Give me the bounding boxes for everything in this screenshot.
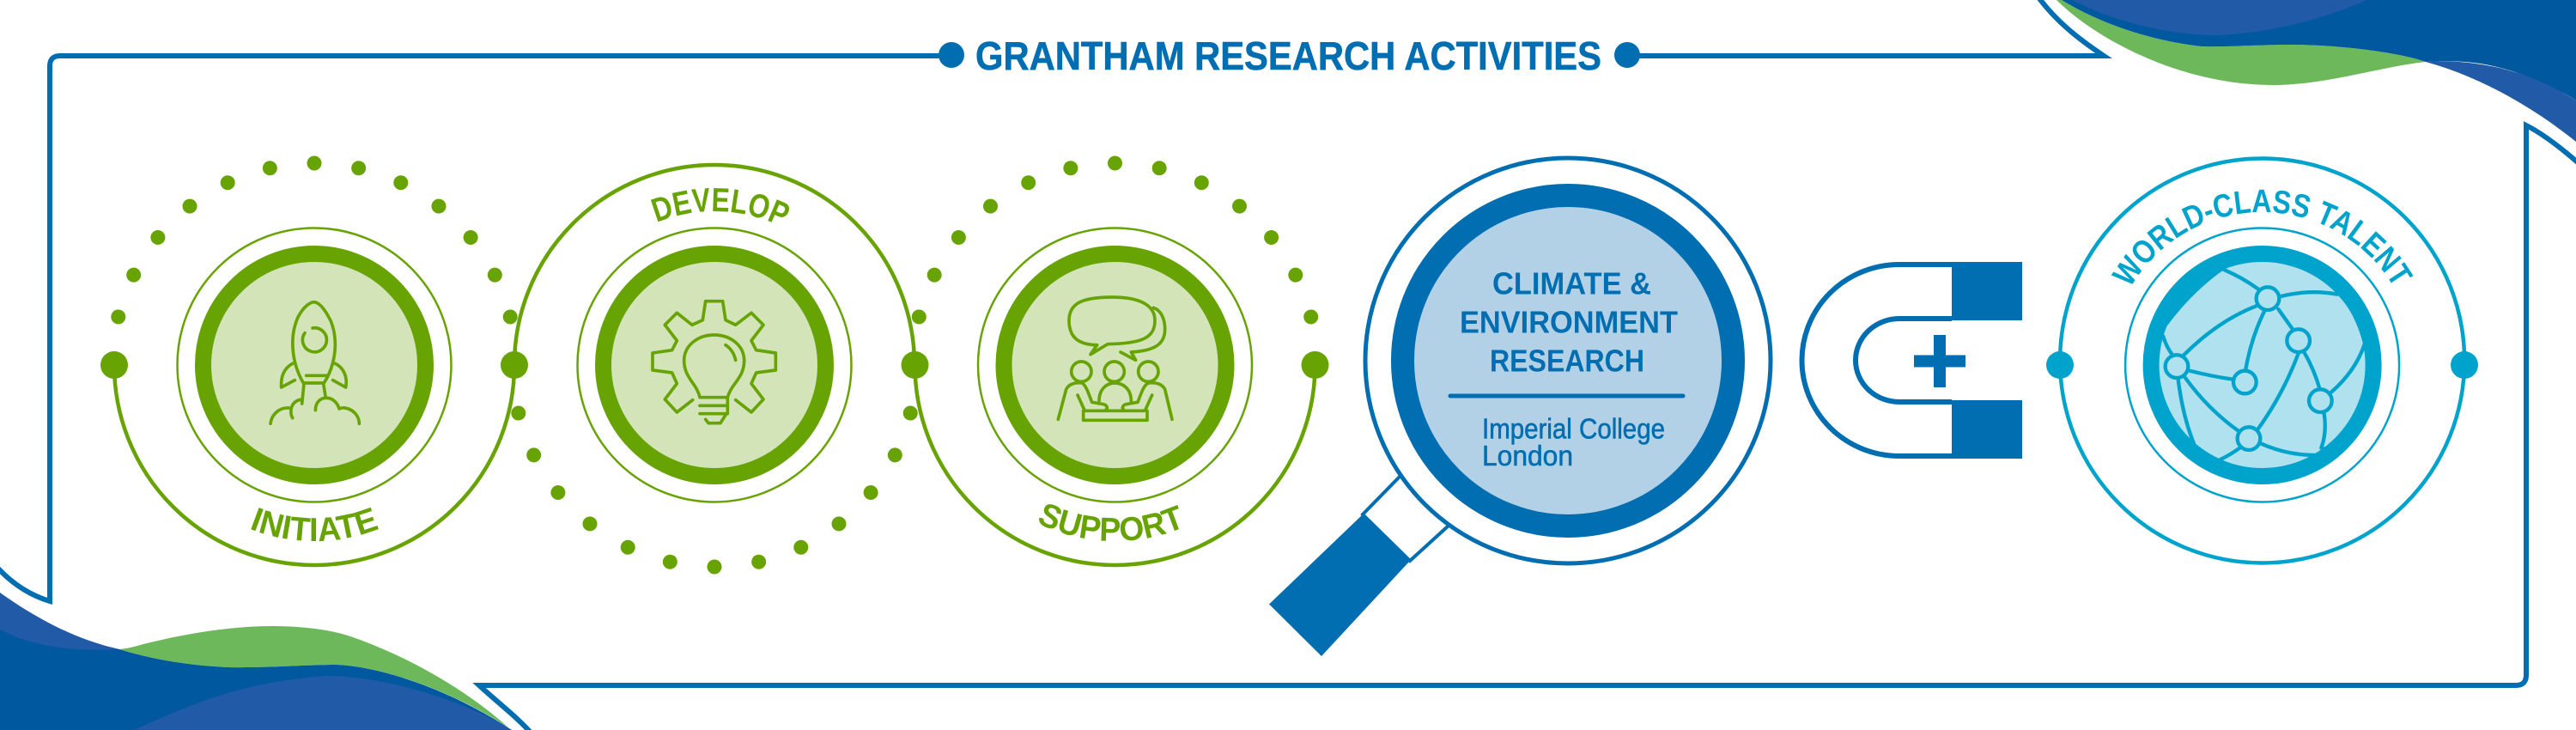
icon: magnet with plus [1801, 262, 2022, 459]
logo text: Imperial College [1482, 412, 1665, 445]
dotted arc: develop [510, 405, 919, 574]
badge: talent [2125, 228, 2399, 502]
magnifier lens [1403, 196, 1733, 526]
title: GRANTHAM RESEARCH ACTIVITIES [975, 33, 1601, 78]
outer ring: talent [2060, 158, 2464, 563]
magnifier outer ring [1365, 158, 1771, 563]
connector dots: green nodes [100, 351, 1329, 379]
label: develop: DEVELOP [651, 187, 789, 222]
lens heading: RESEARCH [1490, 344, 1644, 378]
magnifier handle [1269, 477, 1449, 656]
logo text [1482, 412, 1665, 471]
label: world-class talent: WORLD-CLASS TALENT [2111, 189, 2413, 284]
label: initiate: INITIATE [251, 507, 379, 541]
icon: rocket [270, 302, 359, 423]
icon: globe network [2162, 268, 2365, 460]
panel: support [912, 156, 1319, 567]
decorative wave: top right [2057, 0, 2576, 142]
decorative wave: bottom left [0, 593, 512, 730]
magnifying glass [1269, 158, 1771, 656]
badge: develop [577, 228, 852, 502]
dotted arc: support [910, 156, 1320, 325]
logo text: London [1482, 440, 1573, 471]
solid arc: develop [514, 165, 914, 365]
lens heading: ENVIRONMENT [1460, 304, 1678, 340]
label: support: SUPPORT [1039, 504, 1179, 541]
panel: develop [511, 163, 918, 574]
solid arc: initiate [114, 365, 514, 565]
panel: initiate [111, 156, 518, 567]
solid arc: support [915, 365, 1315, 565]
badge: initiate [177, 228, 452, 502]
connector dots: talent [2046, 351, 2478, 379]
icon: team meeting [1058, 297, 1172, 420]
lens heading: CLIMATE & [1492, 266, 1651, 301]
panel: world-class talent [2046, 156, 2478, 565]
lens divider [1450, 393, 1683, 398]
dotted arc: initiate [110, 156, 519, 325]
lens heading [1460, 266, 1678, 378]
icon: gear with lightbulb [653, 301, 775, 423]
badge: support [978, 228, 1252, 502]
